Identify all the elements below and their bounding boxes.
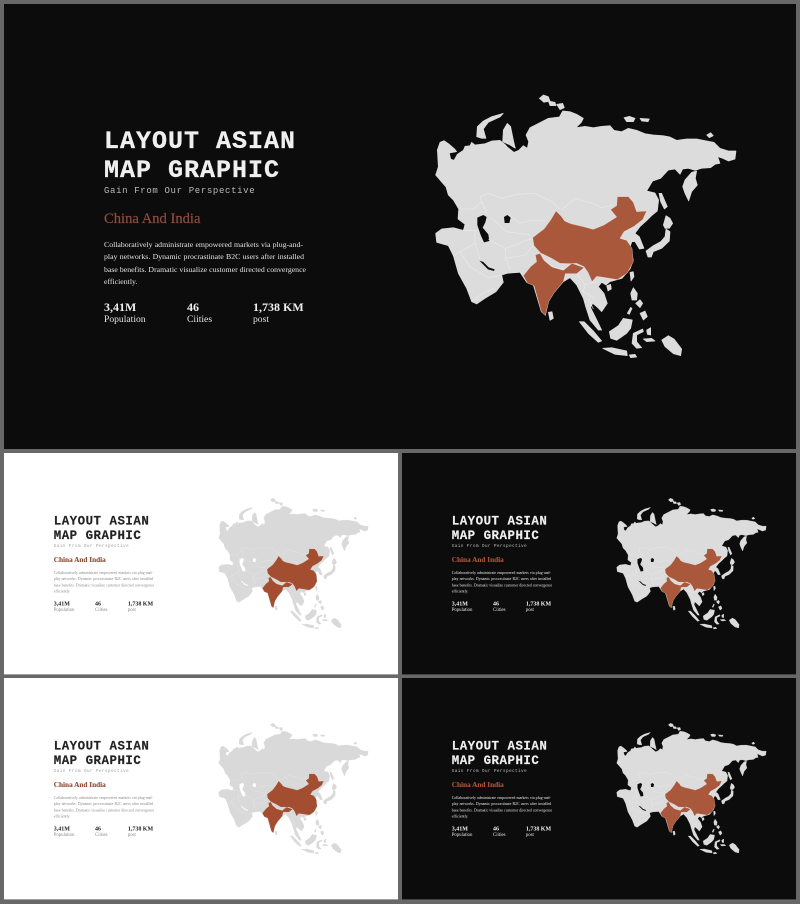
- stat: cities: [493, 825, 506, 838]
- stat: population: Population: [54, 832, 74, 838]
- stat: post: [526, 825, 551, 838]
- stat: cities: 46: [95, 600, 101, 607]
- stat: cities: [493, 600, 506, 613]
- text block: [54, 795, 154, 818]
- stat: post: 1,738 KM: [253, 300, 304, 314]
- panel: light slide top: [4, 453, 398, 674]
- stat: population: Population: [452, 832, 472, 838]
- subtitle: Gain From Our Perspective: [54, 769, 129, 774]
- text block: base benefits. Dramatic visualize customer directed convergence: [452, 583, 552, 587]
- stat: population: Population: [104, 314, 146, 325]
- stat: population: Population: [54, 607, 74, 613]
- stat: post: 1,738 KM: [128, 825, 153, 832]
- stat: post: [253, 300, 304, 325]
- subtitle: Gain From Our Perspective: [452, 544, 527, 549]
- map: Asia with China and India highlighted: [435, 94, 736, 358]
- text block: base benefits. Dramatic visualize customer directed convergence: [104, 264, 306, 274]
- stat: post: post: [253, 314, 269, 325]
- stat: population: [54, 825, 74, 838]
- title: LAYOUT ASIAN: [54, 514, 149, 529]
- panel: dark slide top: [402, 453, 796, 674]
- stat: cities: [95, 600, 108, 613]
- stat: cities: Ciities: [493, 607, 506, 613]
- text block: play networks. Dynamic procrastinate B2C users after installed: [54, 801, 153, 806]
- title: LAYOUT ASIAN: [452, 514, 547, 529]
- text block: base benefits. Dramatic visualize customer directed convergence: [54, 583, 154, 587]
- text block: [452, 795, 552, 818]
- subtitle: Gain From Our Perspective: [452, 769, 527, 774]
- text block: [104, 240, 306, 286]
- stat: cities: [187, 300, 212, 325]
- title: MAP GRAPHIC: [452, 529, 539, 543]
- stat: cities: [95, 825, 108, 838]
- stat: cities: Ciities: [187, 314, 212, 325]
- title: [54, 739, 149, 768]
- panel: main dark slide: [4, 4, 796, 449]
- text block: Collaboratively administrate empowered markets via plug-and-: [54, 570, 153, 575]
- stat: population: 3,41M: [452, 600, 468, 607]
- text block: efficiently.: [104, 277, 137, 286]
- stat: post: [128, 825, 153, 838]
- stat: population: [54, 600, 74, 613]
- stat: post: 1,738 KM: [128, 600, 153, 607]
- stat: population: 3,41M: [104, 300, 136, 314]
- stat: post: post: [526, 832, 534, 838]
- title: MAP GRAPHIC: [452, 754, 539, 768]
- stat: post: 1,738 KM: [526, 600, 551, 607]
- text block: Collaboratively administrate empowered markets via plug-and-: [452, 570, 551, 575]
- title: LAYOUT ASIAN: [452, 739, 547, 754]
- stat: population: [452, 600, 472, 613]
- stat: population: [452, 825, 472, 838]
- text block: [54, 570, 154, 594]
- stat: post: post: [526, 607, 534, 613]
- map: Asia with China and India highlighted: [218, 723, 368, 854]
- subtitle: Gain From Our Perspective: [54, 544, 129, 549]
- title: [54, 514, 149, 543]
- title: LAYOUT ASIAN: [54, 739, 149, 754]
- text block: base benefits. Dramatic visualize customer directed convergence: [54, 808, 154, 812]
- map: Asia with China and India highlighted: [616, 498, 766, 630]
- panel: light slide bottom: [4, 678, 398, 899]
- text block: play networks. Dynamic procrastinate B2C users after installed: [54, 576, 153, 581]
- title: LAYOUT ASIAN: [104, 127, 296, 156]
- heading: China and India: China And India: [54, 781, 106, 789]
- stat: population: 3,41M: [54, 825, 70, 832]
- stat: cities: Ciities: [95, 832, 108, 838]
- stat: post: post: [128, 607, 136, 613]
- stat: cities: Ciities: [95, 607, 108, 613]
- panel: dark slide bottom: [402, 678, 796, 899]
- stat: cities: 46: [493, 600, 499, 607]
- title: [104, 127, 296, 185]
- heading: China and India: China And India: [452, 781, 504, 789]
- heading: China and India: China And India: [54, 556, 106, 564]
- text block: efficiently.: [452, 814, 468, 818]
- title: [452, 514, 547, 543]
- text block: efficiently.: [54, 589, 70, 593]
- stat: population: Population: [452, 607, 472, 613]
- stat: population: 3,41M: [452, 825, 468, 832]
- text block: Collaboratively administrate empowered markets via plug-and-: [104, 240, 303, 248]
- text block: efficiently.: [452, 589, 468, 593]
- stat: post: 1,738 KM: [526, 825, 551, 832]
- title: MAP GRAPHIC: [54, 529, 141, 543]
- stat: post: post: [128, 832, 136, 838]
- heading: China and India: China And India: [104, 211, 200, 227]
- title: MAP GRAPHIC: [104, 156, 280, 185]
- text block: base benefits. Dramatic visualize customer directed convergence: [452, 808, 552, 812]
- stat: cities: 46: [493, 825, 499, 832]
- stat: cities: Ciities: [493, 832, 506, 838]
- stat: cities: 46: [95, 825, 101, 832]
- stat: population: [104, 300, 146, 325]
- text block: efficiently.: [54, 814, 70, 818]
- heading: China and India: China And India: [452, 556, 504, 564]
- text block: play networks. Dynamic procrastinate B2C users after installed: [104, 252, 304, 261]
- title: MAP GRAPHIC: [54, 754, 141, 768]
- text block: play networks. Dynamic procrastinate B2C users after installed: [452, 801, 551, 806]
- text block: play networks. Dynamic procrastinate B2C users after installed: [452, 576, 551, 581]
- map: Asia with China and India highlighted: [218, 498, 368, 629]
- stat: population: 3,41M: [54, 600, 70, 607]
- stat: post: [128, 600, 153, 613]
- stat: post: [526, 600, 551, 613]
- text block: Collaboratively administrate empowered markets via plug-and-: [452, 795, 551, 800]
- subtitle: Gain From Our Perspective: [104, 186, 255, 196]
- text block: Collaboratively administrate empowered markets via plug-and-: [54, 795, 153, 800]
- map: Asia with China and India highlighted: [616, 723, 766, 854]
- title: [452, 739, 547, 768]
- stat: cities: 46: [187, 300, 199, 314]
- text block: [452, 570, 552, 594]
